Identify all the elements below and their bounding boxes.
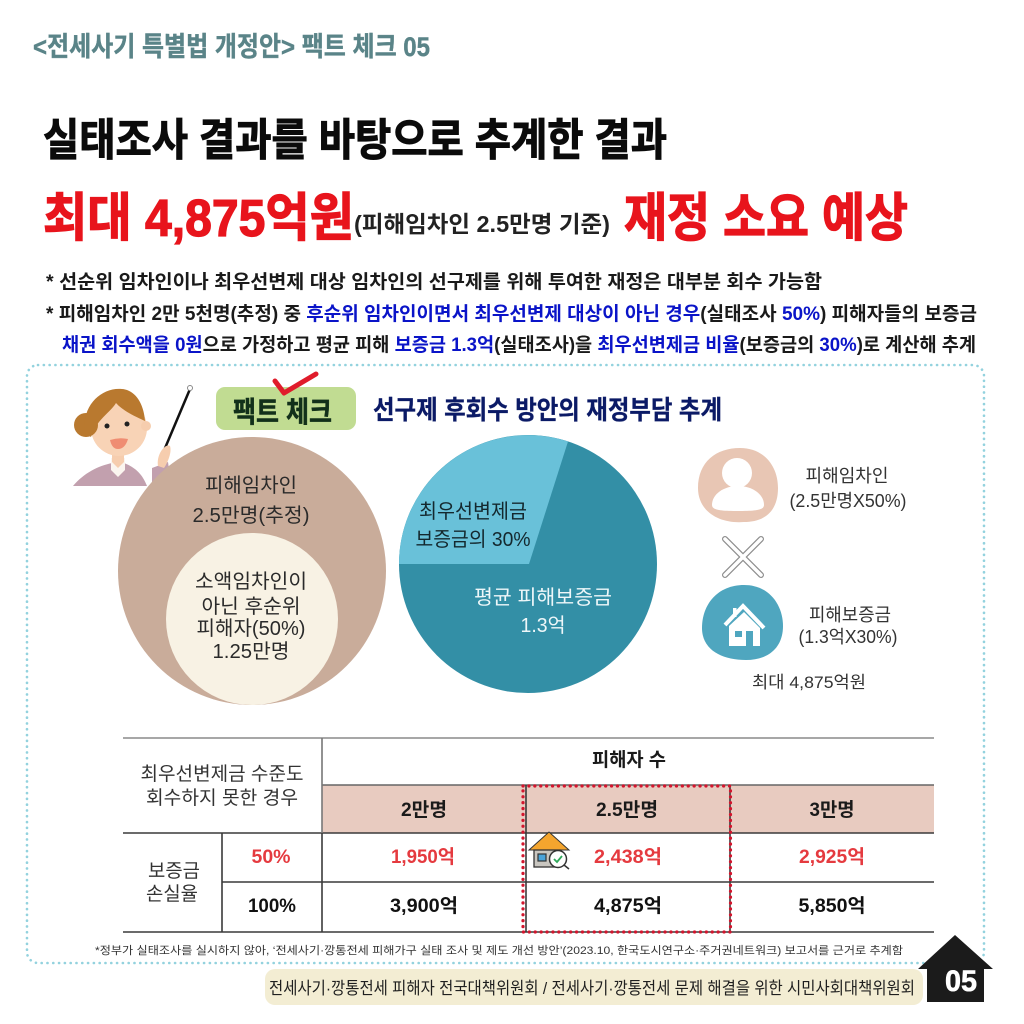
row 50 percent [252,846,865,868]
row 50 percent: 50% [252,847,291,868]
deposit formula label: (1.3억X30%) [798,627,898,647]
victim formula label: 피해임차인 [806,466,888,486]
note 1: * 선순위 임차인이나 최우선변제 대상 임차인의 선구제를 위해 투여한 재정은 대부분 회수 가능함 [46,271,822,293]
icon: presenter with pointer [73,386,192,486]
footer organisations strip: 전세사기·깡통전세 피해자 전국대책위원회 / 전세사기·깡통전세 문제 해결을 위한 시민사회대책위원회 [269,979,915,998]
row header side: 보증금 [148,861,200,882]
basis note: (피해임차인 2.5만명 기준) [354,211,610,237]
outer circle label: 피해임차인 [205,474,297,497]
row 50 percent: 2,438억 [594,846,662,868]
icon: person blob [698,448,778,522]
column headers: 2.5만명 [596,799,658,821]
title line 2 [43,190,908,248]
column headers: 피해자 수 [592,749,666,771]
inner circle label: 1.25만명 [212,640,290,663]
page number house badge [918,935,993,1002]
row 50 percent: 1,950억 [391,846,455,868]
table: loss estimate [123,738,934,932]
row header side: 손실율 [146,883,198,905]
footer organisations strip [265,969,923,1005]
title line 1: 실태조사 결과를 바탕으로 추계한 결과 [43,116,667,165]
page number house badge: 05 [945,965,977,998]
pie label: minimum repayment: 보증금의 30% [416,528,531,551]
header tag: <전세사기 특별법 개정안> 팩트 체크 05 [33,32,430,62]
outer circle label: 2.5만명(추정) [192,504,310,527]
icon: red check mark [275,374,316,393]
column headers [401,749,854,821]
row header side [146,861,200,905]
result label: 최대 4,875억원 [752,673,866,692]
note 2 line 1: * 피해임차인 2만 5천명(추정) 중 후순위 임차인이면서 최우선변제 대상이 아닌 경우(실태조사 50%) 피해자들의 보증금 [46,303,977,325]
inner circle label [195,570,307,663]
victim formula label [790,466,906,511]
header fill [322,785,934,833]
badge: fact check: 팩트 체크 [233,396,332,429]
deposit formula label [798,605,898,647]
outer circle label [192,474,310,527]
notes text block [46,271,977,356]
pie label: minimum repayment [416,500,531,551]
inner circle label: 아닌 후순위 [202,595,300,618]
panel: dotted frame [27,365,984,963]
inner circle label: 피해자(50%) [196,617,306,640]
chart: pie of deposit [399,435,657,693]
pie label: minimum repayment: 최우선변제금 [419,500,527,523]
row header top: 회수하지 못한 경우 [146,787,298,809]
highlight: red dotted box [523,786,730,932]
red conclusion: 재정 소요 예상 [624,190,908,248]
inner circle label: 소액임차인이 [195,570,307,593]
pie label: average deposit [474,586,612,637]
row header top [140,763,304,809]
row 100 percent: 4,875억 [594,895,662,917]
column headers: 2만명 [401,799,447,821]
victim formula label: (2.5만명X50%) [790,491,906,511]
pie label: average deposit: 1.3억 [520,614,566,637]
row 100 percent: 5,850억 [798,895,866,917]
row 100 percent: 100% [248,896,296,917]
red amount: 최대 4,875억원 [43,190,354,248]
deposit formula label: 피해보증금 [809,605,891,625]
column headers: 3만명 [810,799,854,821]
pie label: average deposit: 평균 피해보증금 [474,586,612,609]
chart: nested circles of victims [118,437,386,705]
section heading: 선구제 후회수 방안의 재정부담 추계 [373,395,722,425]
row 100 percent: 3,900억 [390,895,458,917]
badge: fact check [216,374,356,430]
footnote: *정부가 실태조사를 실시하지 않아, ‘전세사기·깡통전세 피해가구 실태 조사 및 제도 개선 방안’(2023.10, 한국도시연구소·주거권네트워크) 보고서를 근거로 추계함 [95,943,903,957]
row header top: 최우선변제금 수준도 [140,763,304,785]
row 50 percent: 2,925억 [799,846,865,868]
grid [123,738,934,932]
icon: house inspection [529,832,569,869]
note 2 line 2: 채권 회수액을 0원으로 가정하고 평균 피해 보증금 1.3억(실태조사)을 최우선변제금 비율(보증금의 30%)로 계산해 추계 [62,334,976,356]
row 100 percent [248,895,866,917]
icon: multiply [725,539,761,575]
icon: house blob [702,585,783,660]
